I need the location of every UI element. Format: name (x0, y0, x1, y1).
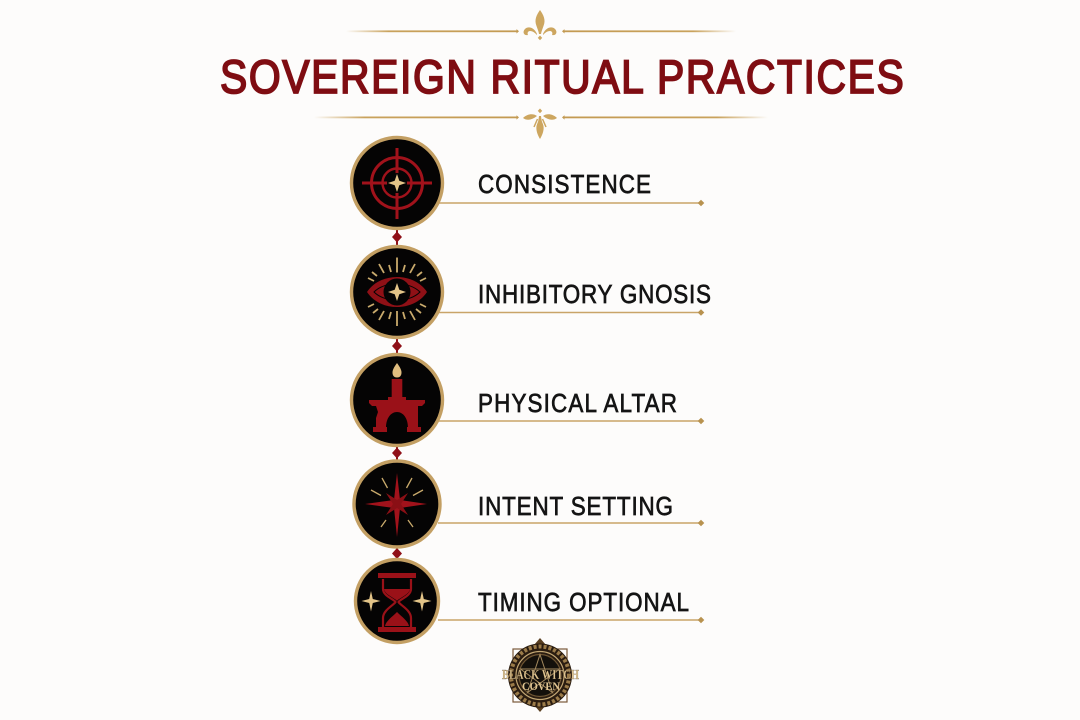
icon: target crosshair (352, 138, 442, 228)
leader line 5 (438, 617, 704, 623)
leader line 1 (438, 200, 704, 206)
item 2: inhibitory gnosis (352, 246, 711, 338)
leader line 2 (438, 309, 704, 316)
leader line 3 (438, 418, 704, 424)
icon: compass star (354, 461, 440, 547)
label: intent setting: INTENT SETTING (478, 493, 673, 521)
logo text line 2: COVEN (522, 679, 560, 693)
label: consistence: CONSISTENCE (478, 171, 651, 199)
connector diamonds (392, 228, 402, 562)
title: SOVEREIGN RITUAL PRACTICES (220, 51, 904, 104)
logo: black witch coven seal (502, 638, 579, 712)
icon: hourglass (356, 560, 438, 642)
label: physical altar: PHYSICAL ALTAR (478, 390, 677, 418)
logo text: BLACK WITCH (502, 668, 579, 683)
leader line 4 (438, 520, 704, 526)
item 1: consistence (352, 138, 704, 228)
top ornament divider (346, 10, 736, 40)
item 4: intent setting (354, 461, 704, 547)
item 3: physical altar (352, 354, 704, 446)
label: timing optional: TIMING OPTIONAL (478, 589, 689, 617)
label: inhibitory gnosis: INHIBITORY GNOSIS (478, 281, 711, 309)
bottom ornament divider (314, 108, 768, 139)
icon: radiant eye (352, 246, 442, 338)
icon: candle on altar (352, 354, 442, 446)
item 5: timing optional (356, 560, 704, 642)
